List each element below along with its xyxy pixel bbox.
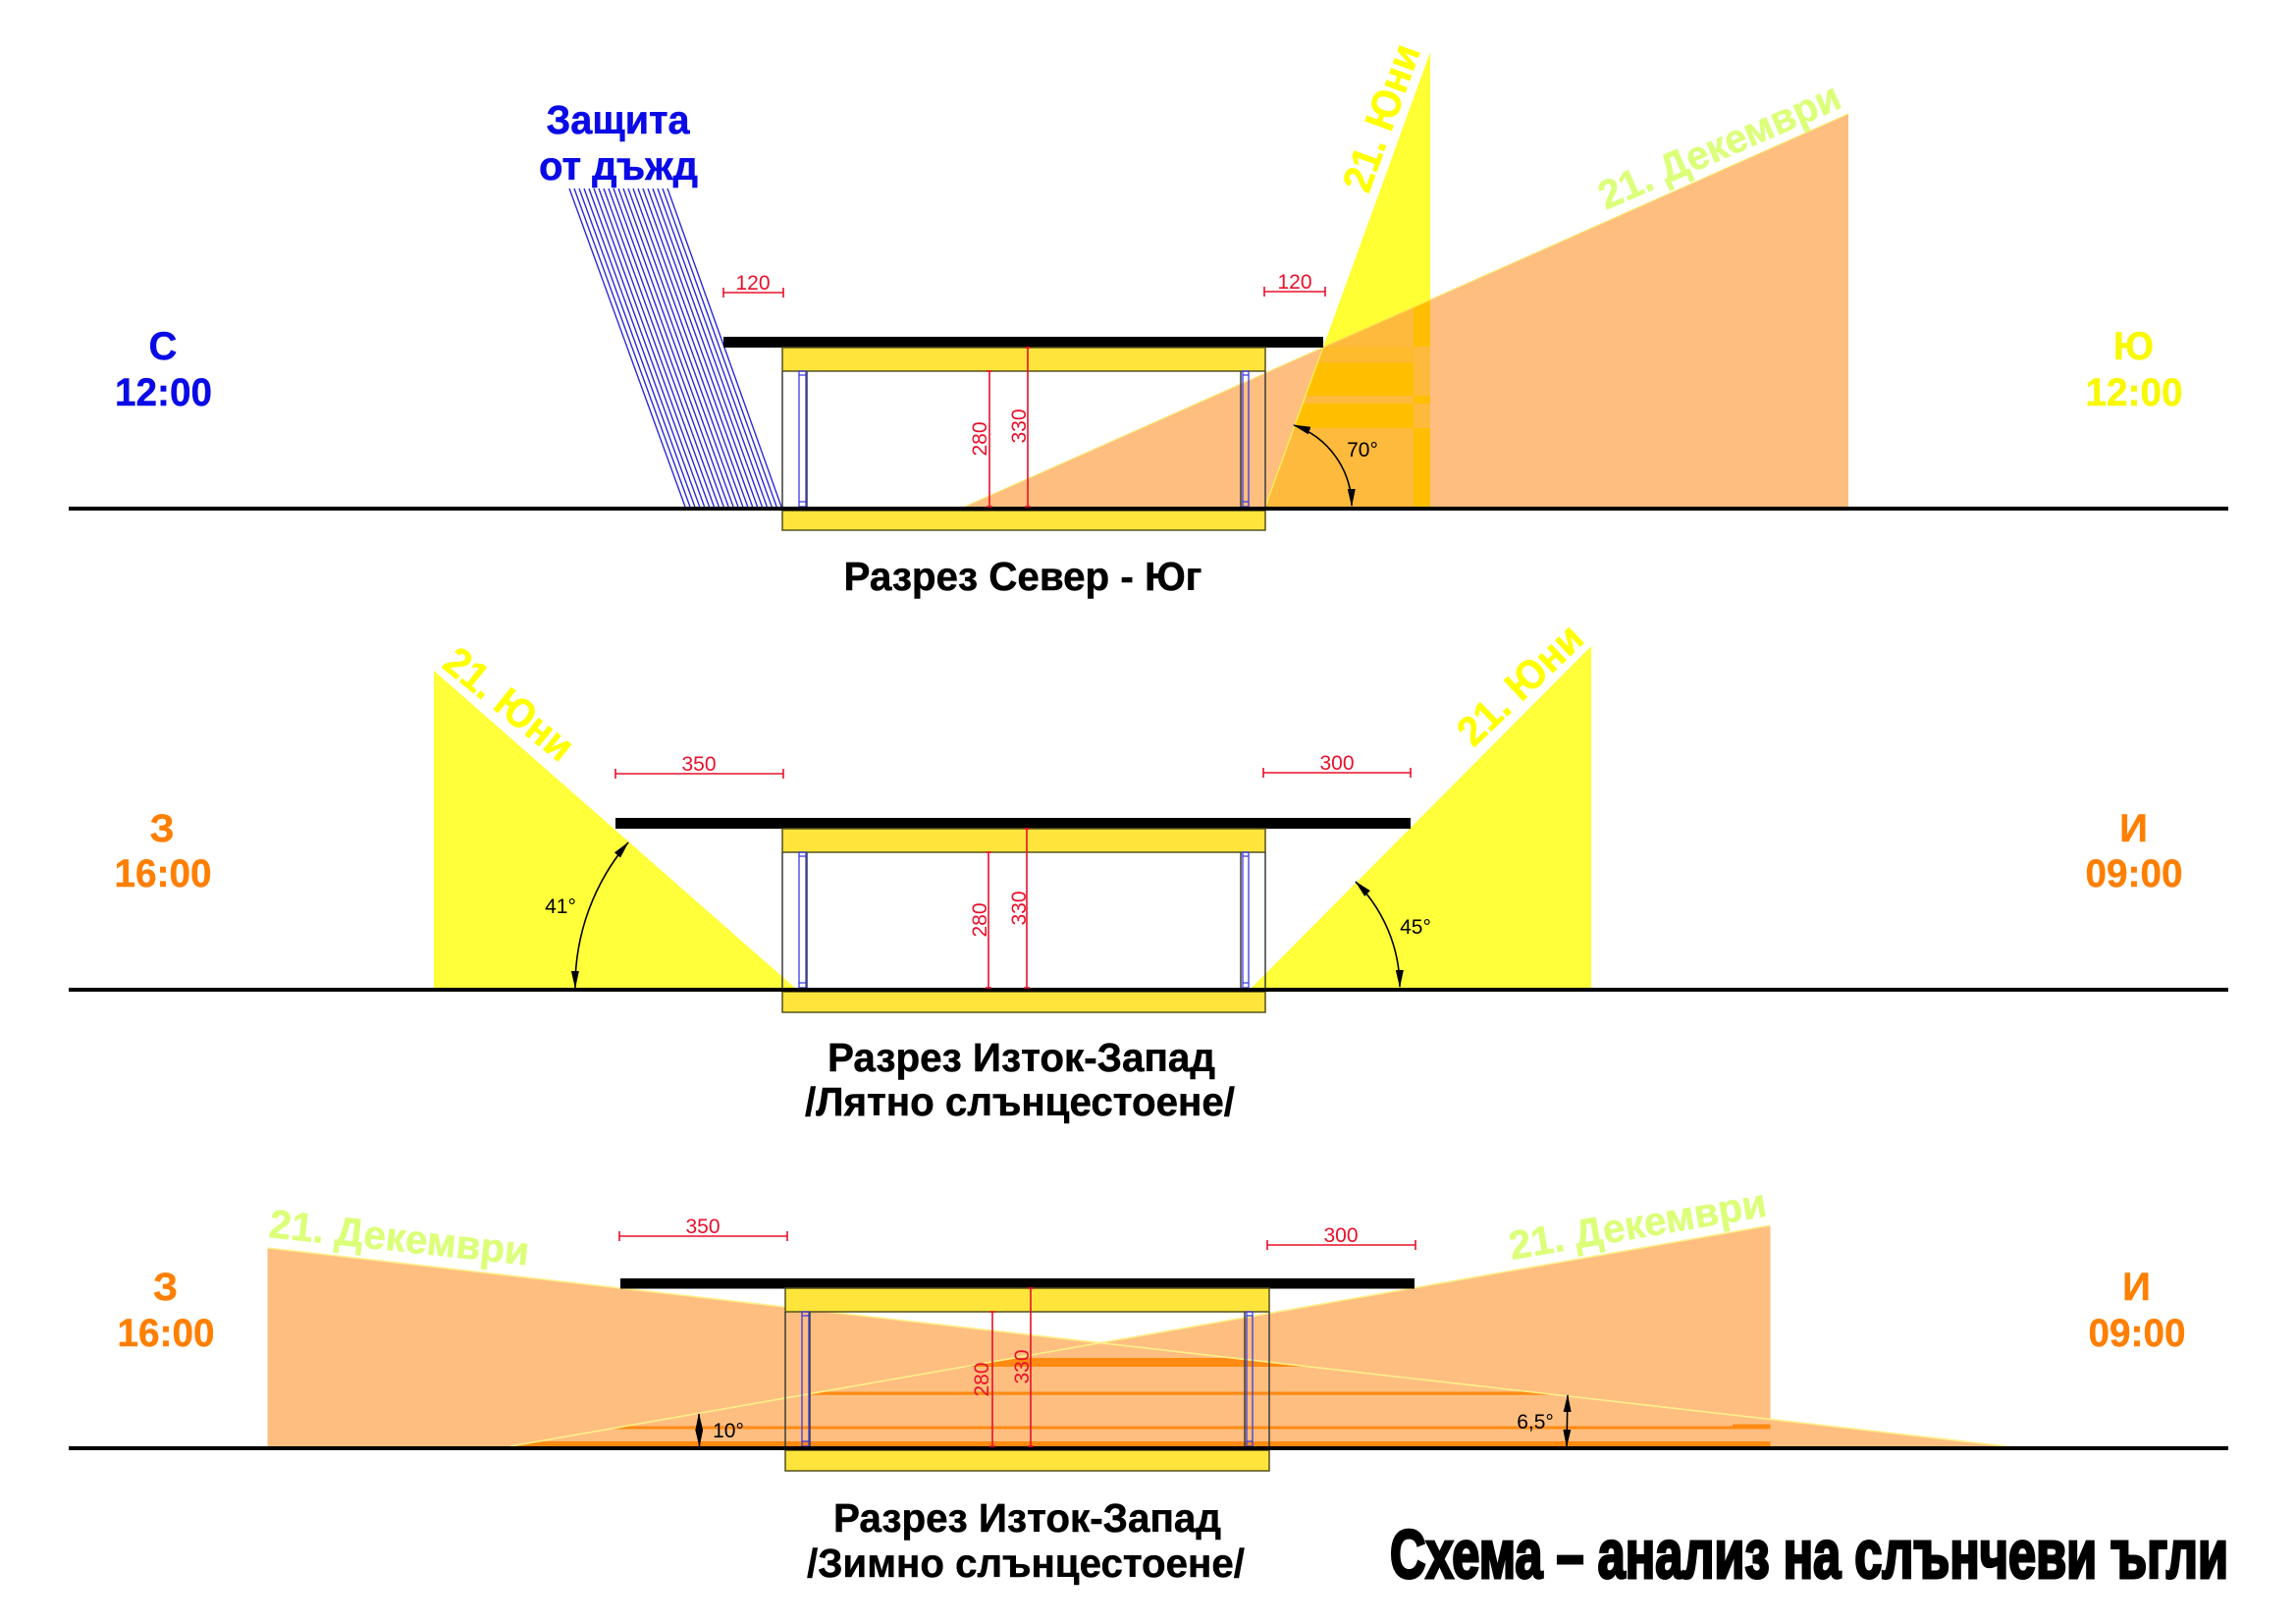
sun wedge: east 21 June	[1250, 646, 1591, 990]
label: west 16:00: З	[149, 807, 175, 850]
panel: section East-West winter solstice	[69, 1180, 2228, 1586]
dimension: 120 left: 120	[735, 272, 771, 295]
dimension: 350: 350	[681, 753, 717, 776]
angle 41 degrees	[545, 842, 628, 988]
roof	[723, 337, 1323, 348]
label: west 21 June: 21. Юни	[435, 637, 583, 770]
dimension: 330: 330	[1011, 1349, 1034, 1384]
wedge edges	[965, 114, 1848, 507]
dimension: 300: 300	[1323, 1224, 1359, 1247]
bottom slab	[785, 1450, 1269, 1471]
label: east 21 June: 21. Юни	[1448, 615, 1592, 755]
label: north 12:00: 12:00	[115, 371, 212, 414]
roof	[615, 818, 1411, 829]
label: rain protection	[539, 97, 698, 189]
label: west 21 December: 21. Декември	[267, 1201, 531, 1274]
label: west 16:00: 16:00	[118, 1312, 214, 1355]
label: west 16:00: 16:00	[114, 852, 212, 895]
angle 45 degrees	[1356, 882, 1431, 987]
ground line	[69, 988, 2228, 992]
dimension: 350	[619, 1216, 787, 1241]
angle 70 degrees	[1294, 425, 1378, 506]
dimension: 280	[971, 1312, 995, 1446]
label: east 09:00	[2089, 1266, 2185, 1355]
section title: East-West winter: /Зимно слънцестоене/	[807, 1541, 1245, 1586]
dimension: 300	[1263, 752, 1411, 778]
dimension: 330	[1008, 348, 1031, 507]
label: south 12:00	[2085, 325, 2183, 414]
dimension: 280: 280	[971, 1362, 993, 1397]
rain protection lines	[569, 189, 781, 507]
label: east 09:00: И	[2122, 1266, 2151, 1309]
label: east 09:00: И	[2119, 807, 2148, 850]
roof	[620, 1278, 1415, 1288]
section title: North-South: Разрез Север - Юг	[844, 554, 1201, 599]
walls and windows	[782, 852, 1265, 988]
label: south 12:00: 12:00	[2085, 371, 2183, 414]
sun wedge: west 21 December	[267, 1248, 2007, 1446]
walls and windows	[785, 1312, 1269, 1446]
angle 6.5 degrees: 6,5°	[1517, 1411, 1554, 1434]
label: rain protection: Защита	[546, 97, 691, 142]
label: rain protection: от дъжд	[539, 143, 698, 189]
angle 70 degrees: 70°	[1347, 439, 1378, 461]
section title: East-West summer: /Лятно слънцестоене/	[805, 1079, 1235, 1124]
section title: East-West winter: Разрез Изток-Запад	[833, 1495, 1221, 1541]
dimension: 280: 280	[969, 421, 991, 457]
label: west 16:00	[118, 1266, 214, 1355]
wedge edges	[267, 1225, 2007, 1446]
dimension: 280	[969, 371, 992, 507]
dimension: 330	[1008, 829, 1031, 988]
dimension: 280	[969, 852, 991, 988]
angle 10 degrees: 10°	[713, 1420, 744, 1442]
overlap stripes	[491, 1358, 1777, 1446]
wedge overlap	[1266, 300, 1430, 507]
dimension: 120 right	[1264, 271, 1325, 297]
dimension: 330: 330	[1008, 891, 1031, 926]
dimension: 300	[1267, 1224, 1415, 1250]
top slab	[785, 1288, 1269, 1312]
sun wedge: 21 December	[965, 114, 1848, 507]
dimension: 350: 350	[685, 1216, 721, 1238]
dimension: 120 left	[723, 272, 783, 298]
label: east 09:00: 09:00	[2085, 852, 2183, 895]
label: east 09:00: 09:00	[2089, 1312, 2185, 1355]
section title: East-West summer	[805, 1035, 1235, 1124]
label: south 12:00: Ю	[2113, 325, 2154, 368]
panel: section North-South	[69, 37, 2228, 599]
dimension: 120 right: 120	[1277, 271, 1312, 294]
top slab	[782, 829, 1265, 852]
sun wedge: west 21 June	[434, 671, 797, 990]
dimension: 300: 300	[1319, 752, 1355, 775]
label: north 12:00	[115, 325, 212, 414]
angle 6.5 degrees	[1517, 1395, 1568, 1446]
label: 21 December: 21. Декември	[1591, 74, 1847, 218]
label: east 09:00	[2085, 807, 2183, 895]
section title: East-West summer: Разрез Изток-Запад	[828, 1035, 1215, 1080]
sun wedge: 21 June	[1265, 52, 1430, 507]
dimension: 330	[1011, 1288, 1034, 1446]
angle 10 degrees	[699, 1414, 744, 1446]
bottom slab	[782, 511, 1265, 530]
label: east 21 December: 21. Декември	[1506, 1180, 1770, 1269]
label: north 12:00: С	[149, 325, 177, 368]
dimension: 280: 280	[969, 902, 991, 938]
top slab	[782, 348, 1265, 371]
section title: East-West winter	[807, 1495, 1245, 1586]
label: west 16:00: З	[153, 1266, 178, 1309]
walls and windows	[782, 371, 1265, 507]
label: west 16:00	[114, 807, 212, 895]
dimension: 330: 330	[1008, 408, 1031, 444]
angle 41 degrees: 41°	[545, 895, 576, 918]
ground line	[69, 1446, 2228, 1450]
dimension: 350	[615, 753, 783, 779]
bottom slab	[782, 992, 1265, 1012]
label: 21 June: 21. Юни	[1333, 37, 1429, 197]
angle 45 degrees: 45°	[1400, 916, 1431, 939]
ground line	[69, 507, 2228, 511]
panel: section East-West summer solstice	[69, 615, 2228, 1124]
sun wedge: east 21 December	[510, 1225, 1771, 1446]
